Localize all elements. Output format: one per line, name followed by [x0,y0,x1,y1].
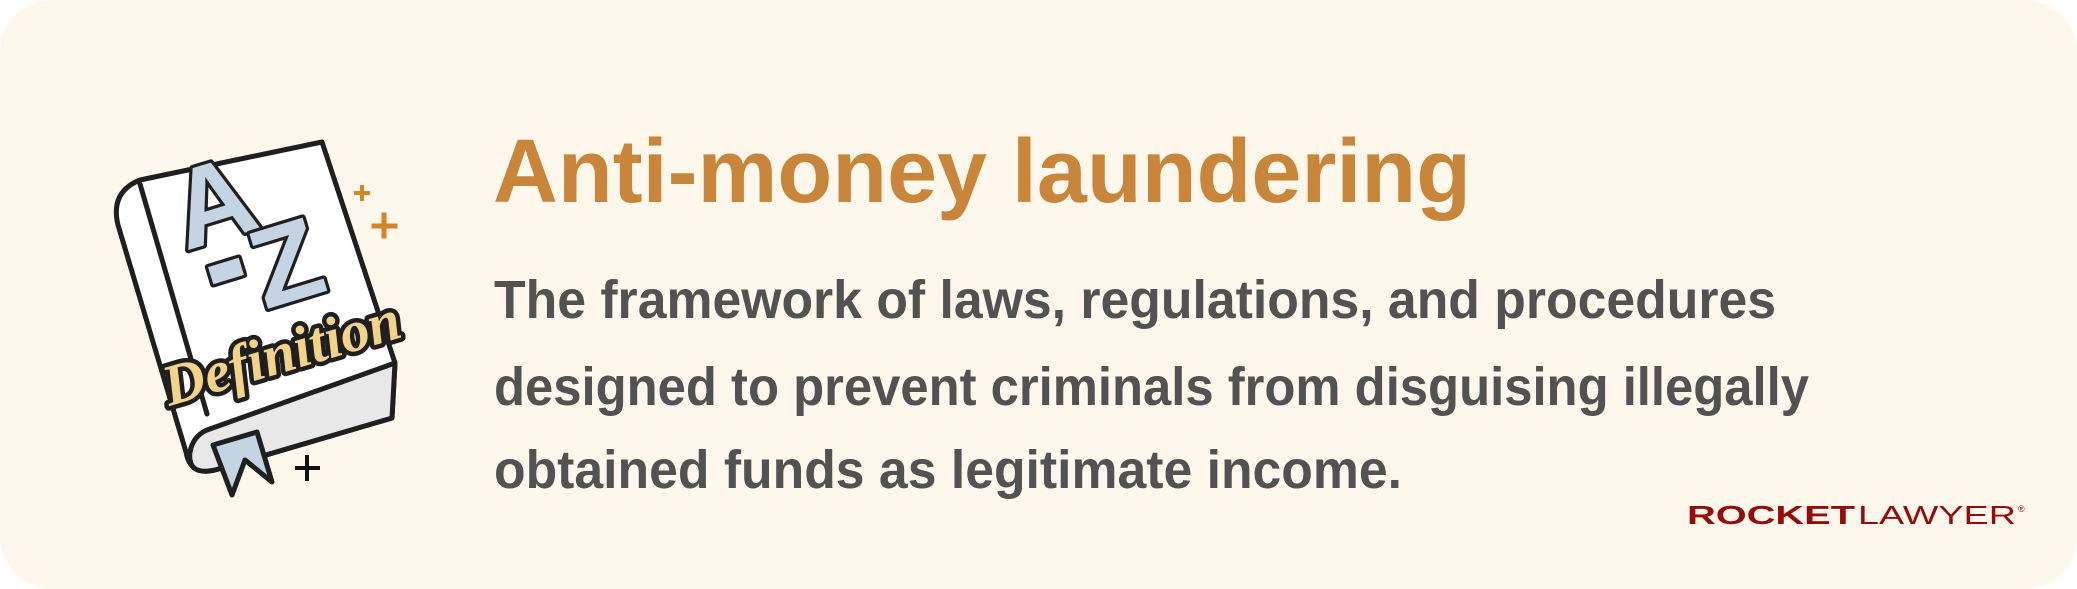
book body [116,142,395,471]
logo: Rocket Lawyer: ® [2018,504,2025,514]
letters A - Z: A [156,131,270,274]
icon: dictionary book [116,131,408,495]
letters A - Z: Z [235,193,337,333]
bookmark [213,432,272,495]
logo: Rocket Lawyer [1687,500,2025,530]
spine line [140,184,207,414]
page block [190,363,395,471]
letters A - Z [156,131,337,333]
definition text [494,270,1809,500]
icon: sparkles [297,187,395,479]
Definition script: Definition [154,287,408,419]
logo: Rocket Lawyer: LAWYER [1858,500,2016,530]
definition text: obtained funds as legitimate income. [494,440,1402,500]
logo: Rocket Lawyer: ROCKET [1687,500,1855,530]
definition text: The framework of laws, regulations, and procedures [494,270,1776,330]
definition text: designed to prevent criminals from disguising illegally [494,357,1809,417]
title: Anti-money laundering [493,122,1471,222]
